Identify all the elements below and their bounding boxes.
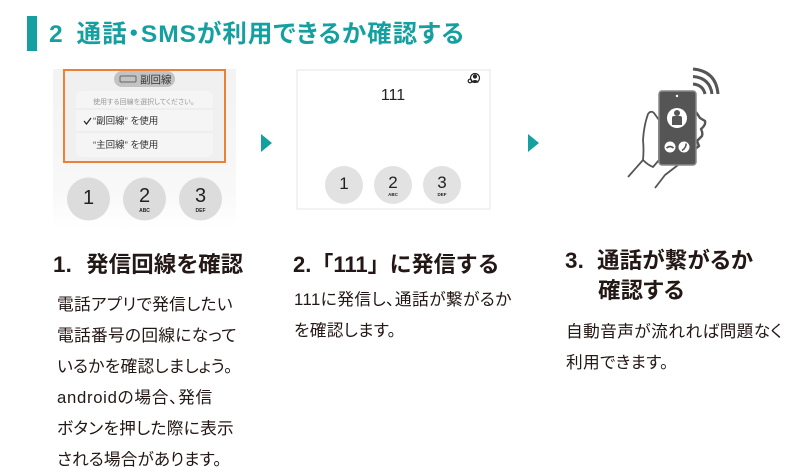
step 2 keypad bbox=[325, 166, 461, 204]
text: step 2 description bbox=[294, 290, 512, 340]
text: step 1 description: いるかを確認しましょう。 bbox=[57, 357, 233, 376]
line label pill bbox=[114, 71, 175, 87]
step 2 keypad: DEF bbox=[438, 192, 447, 197]
step 2 keypad: 1 bbox=[339, 174, 349, 193]
step 1 keypad bbox=[67, 178, 222, 220]
heading: step 3: 確認する bbox=[598, 278, 684, 303]
text: step 1 description: 電話番号の回線になって bbox=[57, 326, 237, 345]
icon: hand holding phone on a call bbox=[628, 69, 718, 188]
step 1 keypad: DEF bbox=[196, 208, 206, 214]
line label pill: 副回線 bbox=[140, 73, 172, 86]
dialed number: 111 bbox=[381, 87, 405, 104]
line selection menu: 使用する回線を選択してください。 bbox=[93, 97, 194, 106]
text: step 1 description: ボタンを押した際に表示 bbox=[57, 419, 234, 438]
text: step 2 description: を確認します。 bbox=[294, 321, 396, 340]
step 1 keypad: 3 bbox=[195, 185, 206, 207]
orange highlight frame bbox=[64, 70, 225, 162]
step 2 keypad: 3 bbox=[437, 173, 447, 192]
dialog background bbox=[64, 70, 225, 161]
heading: step 2: 2.「111」に発信する bbox=[293, 252, 500, 277]
step 2 keypad: ABC bbox=[388, 192, 399, 197]
text: step 1 description: される場合があります。 bbox=[57, 450, 222, 469]
text: step 3 description bbox=[566, 322, 782, 372]
text: step 3 description: 利用できます。 bbox=[566, 353, 669, 372]
text: step 1 description: 電話アプリで発信したい bbox=[57, 295, 233, 314]
text: step 1 description: androidの場合、発信 bbox=[57, 388, 213, 407]
step 2 keypad: 2 bbox=[388, 173, 398, 192]
heading: step 3 bbox=[565, 248, 753, 303]
step 1 keypad: 1 bbox=[83, 187, 94, 209]
arrow 2 bbox=[528, 134, 539, 152]
step 1 keypad: ABC bbox=[139, 208, 150, 214]
line selection menu: “副回線” を使用 bbox=[93, 115, 158, 127]
step 1 keypad: 2 bbox=[139, 185, 150, 207]
section title: 2 通話・SMSが利用できるか確認する bbox=[49, 21, 465, 48]
text: step 3 description: 自動音声が流れれば問題なく bbox=[566, 322, 782, 341]
line selection menu: “主回線” を使用 bbox=[93, 139, 158, 151]
heading: step 1: 1. 発信回線を確認 bbox=[53, 252, 243, 277]
step 2 screenshot frame bbox=[297, 70, 490, 209]
icon: account bbox=[468, 74, 480, 83]
arrow 1 bbox=[261, 134, 272, 152]
line selection menu bbox=[76, 91, 213, 157]
text: step 1 description bbox=[57, 295, 237, 469]
text: step 2 description: 111に発信し、通話が繋がるか bbox=[294, 290, 512, 309]
section marker bar bbox=[27, 16, 37, 51]
heading: step 3: 3. 通話が繋がるか bbox=[565, 248, 753, 273]
